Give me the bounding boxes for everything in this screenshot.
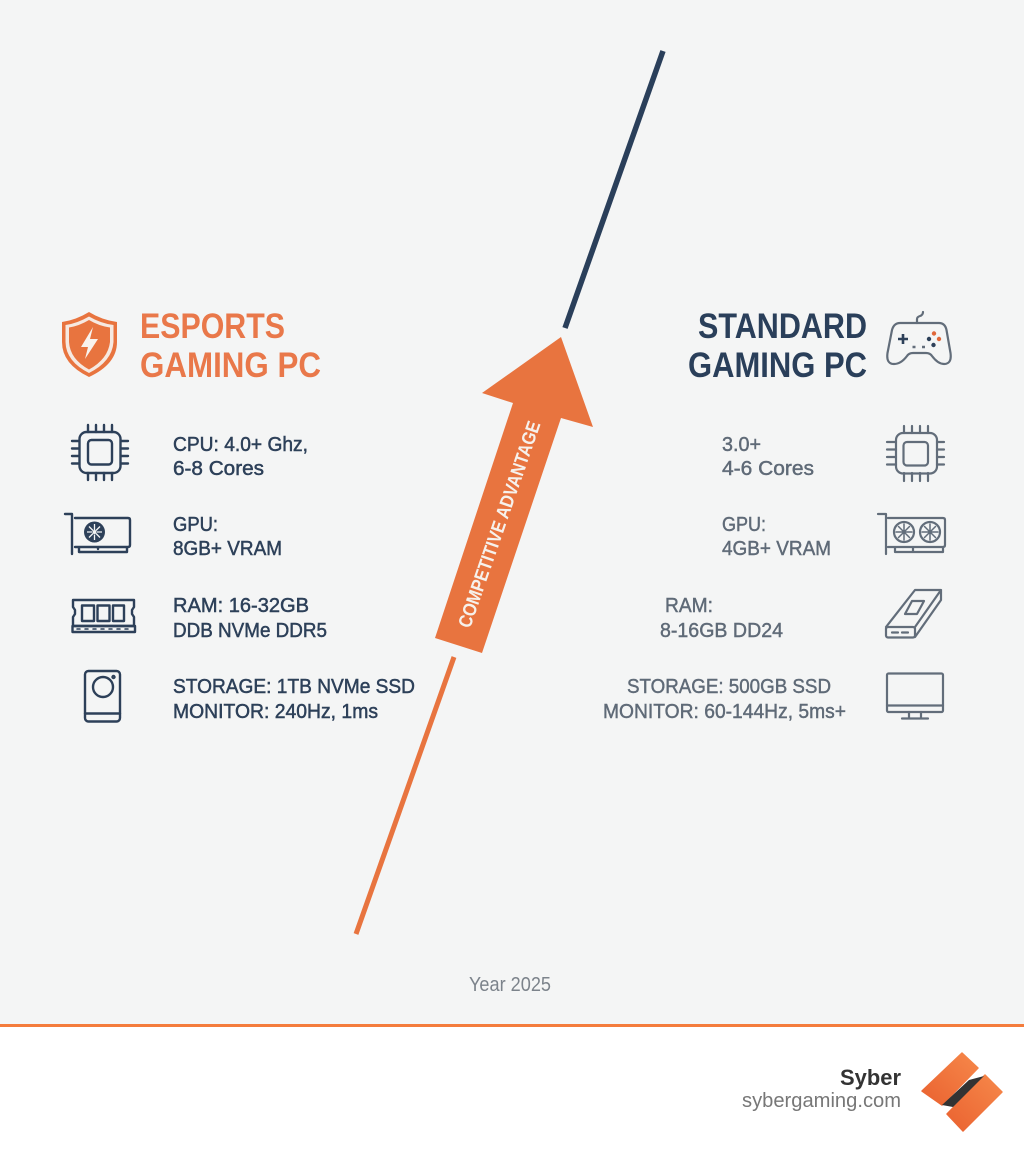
spec: ram bbox=[660, 594, 783, 642]
icon: gpu single fan bbox=[65, 514, 130, 554]
heading: standard gaming pc: STANDARD bbox=[698, 307, 867, 346]
brand url: sybergaming.com bbox=[742, 1090, 901, 1112]
spec: cpu bbox=[722, 433, 814, 480]
icon: storage drive bbox=[85, 671, 120, 722]
heading: esports gaming pc: ESPORTS bbox=[140, 307, 285, 346]
brand name: Syber bbox=[840, 1065, 901, 1090]
icon: cpu bbox=[887, 426, 944, 481]
icon: ssd box bbox=[886, 590, 941, 638]
spec: storage and monitor: MONITOR: 60-144Hz, 5ms+ bbox=[603, 700, 846, 723]
panel: esports gaming pc bbox=[62, 307, 415, 723]
heading: standard gaming pc: GAMING PC bbox=[688, 346, 867, 385]
spec: ram: RAM: bbox=[665, 594, 713, 617]
spec: ram: RAM: 16-32GB bbox=[173, 594, 309, 617]
icon: monitor bbox=[887, 674, 943, 718]
spec: storage and monitor: MONITOR: 240Hz, 1ms bbox=[173, 700, 378, 723]
spec: storage and monitor bbox=[603, 675, 846, 723]
panel: standard gaming pc bbox=[603, 307, 951, 723]
spec: ram bbox=[173, 594, 327, 642]
heading: standard gaming pc bbox=[688, 307, 867, 385]
spec: cpu: CPU: 4.0+ Ghz, bbox=[173, 433, 308, 456]
spec: cpu bbox=[173, 433, 308, 480]
icon: ram module bbox=[72, 600, 135, 632]
spec: storage and monitor: STORAGE: 500GB SSD bbox=[627, 675, 831, 698]
spec: gpu: 4GB+ VRAM bbox=[722, 537, 831, 560]
spec: cpu: 3.0+ bbox=[722, 433, 761, 456]
spec: gpu: 8GB+ VRAM bbox=[173, 537, 282, 560]
arrow: competitive advantage bbox=[435, 337, 593, 653]
icon: gpu dual fan bbox=[878, 514, 945, 554]
spec: cpu: 6-8 Cores bbox=[173, 457, 264, 480]
orange rising line bbox=[356, 657, 454, 934]
spec: ram: DDB NVMe DDR5 bbox=[173, 619, 327, 642]
icon: cpu bbox=[72, 425, 128, 480]
spec: gpu: GPU: bbox=[722, 513, 766, 536]
heading: esports gaming pc bbox=[140, 307, 321, 385]
icon: game controller bbox=[887, 312, 951, 364]
spec: gpu: GPU: bbox=[173, 513, 218, 536]
footer brand bbox=[742, 1053, 1002, 1131]
navy rising line bbox=[565, 51, 663, 328]
axis label: year: Year 2025 bbox=[469, 974, 551, 996]
spec: storage and monitor bbox=[173, 675, 415, 723]
icon: syber logo bbox=[922, 1053, 1002, 1131]
spec: gpu bbox=[722, 513, 831, 560]
footer rule bbox=[0, 1024, 1024, 1027]
arrow label: COMPETITIVE ADVANTAGE bbox=[455, 419, 545, 631]
icon: shield with bolt bbox=[62, 312, 117, 377]
spec: ram: 8-16GB DD24 bbox=[660, 619, 783, 642]
heading: esports gaming pc: GAMING PC bbox=[140, 346, 321, 385]
spec: gpu bbox=[173, 513, 282, 560]
spec: cpu: 4-6 Cores bbox=[722, 457, 814, 480]
spec: storage and monitor: STORAGE: 1TB NVMe SSD bbox=[173, 675, 415, 698]
